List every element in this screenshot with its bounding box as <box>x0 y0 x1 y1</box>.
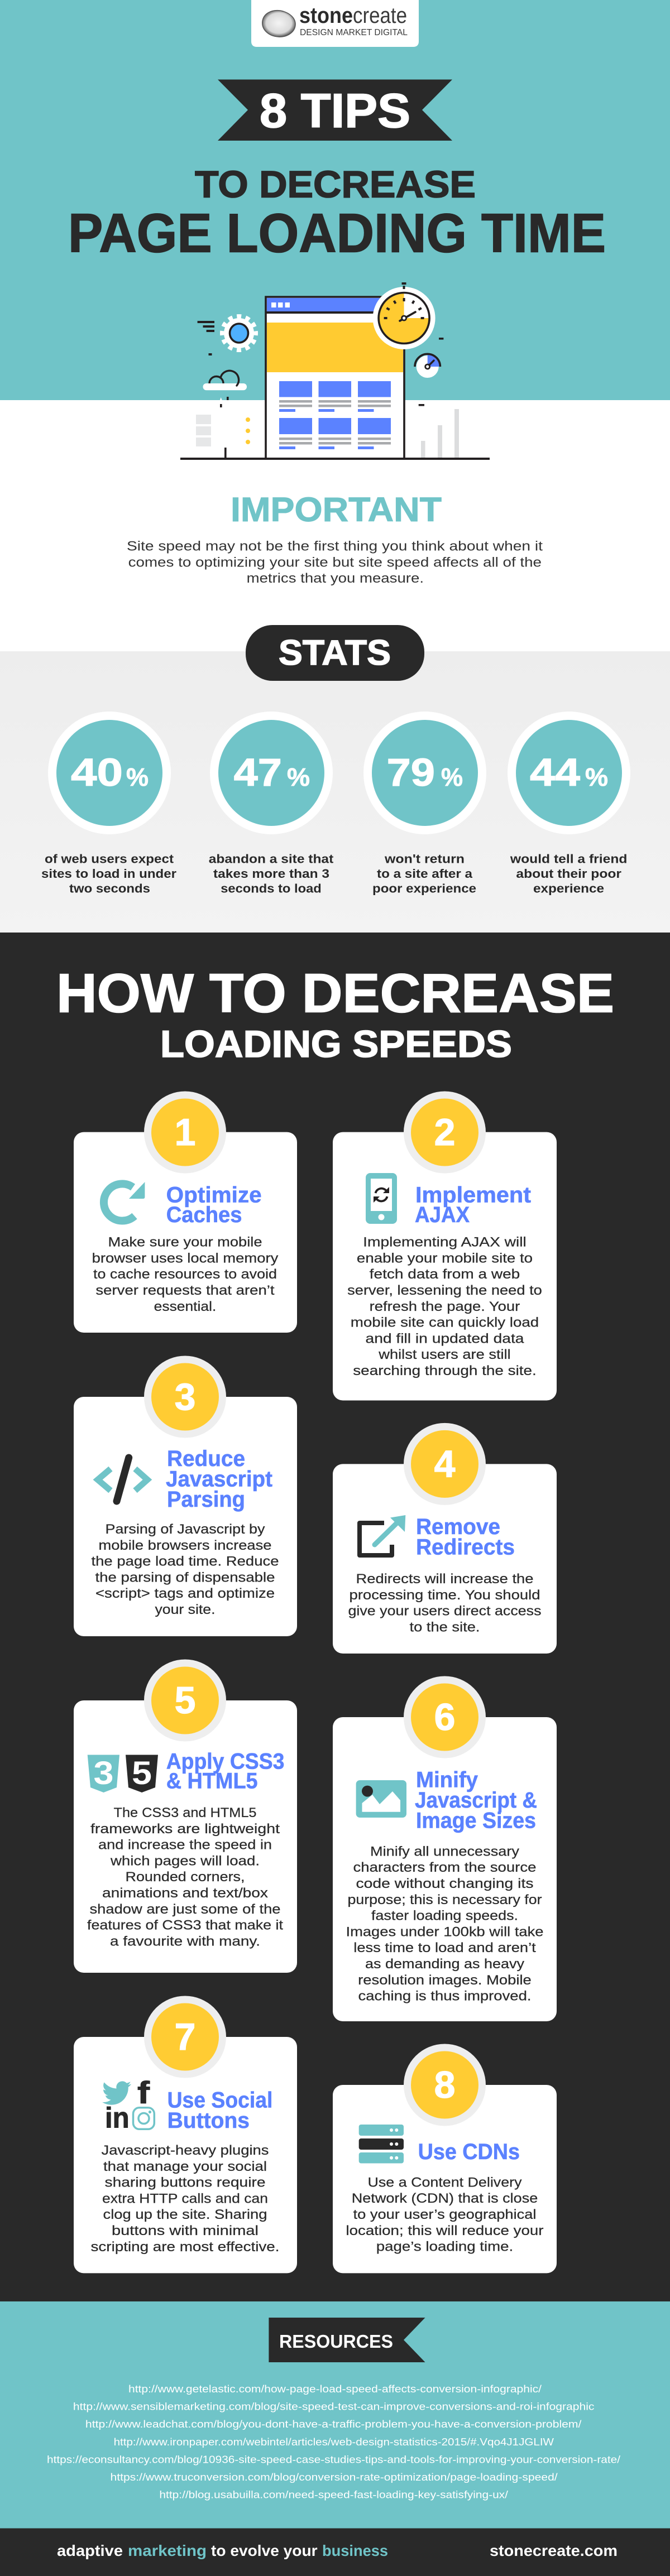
panel: tip 6: Javascript & <box>415 1788 537 1813</box>
panel: tip 4: Redirects <box>416 1535 515 1559</box>
panel: tip 8: Use CDNs <box>418 2140 520 2164</box>
footer <box>0 2528 670 2576</box>
icon: social buttons <box>102 2075 154 2135</box>
bar chart <box>421 409 459 458</box>
stat 44% <box>508 712 630 896</box>
panel: tip 7: scripting are most effective. <box>90 2239 279 2255</box>
footer: to evolve your <box>211 2542 318 2559</box>
panel: tip 6: Minify <box>416 1768 478 1792</box>
panel: tip 5: & HTML5 <box>166 1769 258 1794</box>
panel: tip 7: that manage your social <box>103 2159 267 2174</box>
panel: tip 2: fetch data from a web <box>370 1267 520 1282</box>
footer: stonecreate.com <box>490 2542 618 2559</box>
stats pill heading <box>246 625 424 681</box>
resource links: http://www.leadchat.com/blog/you-dont-have-a-traffic-problem-you-have-a-conversion-problem/ <box>85 2418 582 2430</box>
icon: phone sync <box>366 1173 397 1224</box>
ribbon banner: 8 tips <box>218 79 452 141</box>
panel: tip 4: Redirects will increase the <box>356 1571 534 1587</box>
stat 47%: % <box>287 763 310 791</box>
stat 44%: 44 <box>530 751 580 794</box>
panel: tip 6: Images under 100kb will take <box>346 1924 544 1939</box>
icon: html5 shield: 5 <box>132 1755 152 1791</box>
panel: tip 1 <box>74 1092 297 1333</box>
stat 44%: experience <box>533 882 604 896</box>
stats pill heading: STATS <box>279 633 391 672</box>
panel: tip 6: purpose; this is necessary for <box>347 1892 542 1907</box>
stat 79%: 79 <box>387 751 435 794</box>
panel: tip 5 <box>74 1660 297 1973</box>
stat 44%: about their poor <box>516 867 621 881</box>
resources flag heading <box>269 2318 425 2362</box>
panel: tip 2: enable your mobile site to <box>357 1251 533 1266</box>
icon: cloud <box>203 371 247 390</box>
panel: tip 1: Make sure your mobile <box>108 1235 262 1250</box>
stat 44%: % <box>585 763 608 791</box>
panel: tip 4: processing time. You should <box>350 1588 540 1603</box>
panel: tip 2: Implement <box>415 1183 531 1208</box>
footer: adaptive <box>57 2542 123 2559</box>
logo: stone <box>299 3 353 28</box>
important text block: comes to optimizing your site but site speed affects all of the <box>128 555 542 570</box>
panel: tip 3: <script> tags and optimize <box>95 1586 275 1601</box>
panel: tip 8: Network (CDN) that is close <box>352 2191 538 2206</box>
panel: tip 5: a favourite with many. <box>110 1934 260 1949</box>
stat 47% <box>209 712 334 896</box>
stat 79%: % <box>441 763 463 791</box>
panel: tip 6: as demanding as heavy <box>365 1957 524 1972</box>
resource links: http://www.ironpaper.com/webintel/articles/web-design-statistics-2015/#.Vqo4J1JGLIW <box>114 2436 554 2448</box>
stat 79% <box>363 712 486 896</box>
panel: tip 2 <box>333 1092 557 1401</box>
stat 40%: of web users expect <box>45 852 174 866</box>
icon: code brackets <box>98 1458 147 1501</box>
panel: tip 8: to your user’s geographical <box>353 2207 536 2222</box>
panel: tip 6: Minify all unnecessary <box>370 1844 519 1859</box>
stat 40%: sites to load in under <box>41 867 176 881</box>
panel: tip 6 <box>333 1676 557 2021</box>
icon: html5 shield <box>126 1755 158 1792</box>
stat 47%: 47 <box>234 751 282 794</box>
dark section background <box>0 933 670 2301</box>
panel: tip 2: mobile site can quickly load <box>351 1315 539 1330</box>
illustration: browser with stopwatch <box>180 282 490 460</box>
panel: tip 1: Caches <box>166 1203 242 1227</box>
stat 44%: would tell a friend <box>510 852 627 866</box>
panel: tip 6: 6 <box>434 1696 455 1738</box>
logo <box>251 0 419 47</box>
panel: resources <box>0 2301 670 2528</box>
title: TO DECREASE <box>195 163 476 205</box>
icon: stopwatch <box>373 282 436 349</box>
important text block: IMPORTANT <box>231 491 442 528</box>
panel: tip 6: caching is thus improved. <box>358 1989 532 2004</box>
panel: tip 3 <box>74 1356 297 1636</box>
panel: tip 5: and increase the speed in <box>98 1838 272 1853</box>
panel: tip 2: 2 <box>434 1111 455 1154</box>
panel: tip 7: buttons with minimal <box>112 2223 259 2238</box>
stat 79%: to a site after a <box>377 867 473 881</box>
hero section background <box>0 0 670 400</box>
panel: tip 3: the page load time. Reduce <box>92 1554 279 1569</box>
panel: tip 8: location; this will reduce your <box>346 2223 544 2238</box>
ribbon banner: 8 tips: 8 TIPS <box>260 84 410 138</box>
panel: tip 6: less time to load and aren’t <box>353 1940 536 1955</box>
stat 40% <box>41 712 176 896</box>
panel: tip 5: The CSS3 and HTML5 <box>114 1805 257 1820</box>
panel: tip 8: 8 <box>434 2064 455 2106</box>
panel: tip 3: Parsing <box>167 1487 245 1512</box>
resource links: https://econsultancy.com/blog/10936-site-speed-case-studies-tips-and-tools-for-improving-your-conversion-rate/ <box>47 2453 621 2465</box>
panel: tip 5: Rounded corners, <box>125 1869 245 1885</box>
important text block: metrics that you measure. <box>247 571 424 586</box>
resource links: https://www.truconversion.com/blog/conversion-rate-optimization/page-loading-speed/ <box>110 2471 558 2483</box>
resource links: http://www.getelastic.com/how-page-load-speed-affects-conversion-infographic/ <box>128 2383 542 2395</box>
panel: stats <box>0 625 670 933</box>
panel: tip 1: Optimize <box>166 1183 262 1208</box>
heading: how to decrease: HOW TO DECREASE <box>56 962 614 1023</box>
icon: css3 shield: 3 <box>94 1755 114 1791</box>
panel: tip 4: give your users direct access <box>348 1604 542 1619</box>
panel: tip 2: Implementing AJAX will <box>363 1235 527 1250</box>
panel: tip 4: Remove <box>416 1515 500 1539</box>
panel: tip 2: refresh the page. Your <box>370 1299 520 1314</box>
heading: how to decrease: LOADING SPEEDS <box>160 1023 512 1065</box>
panel: tip 7: Javascript-heavy plugins <box>102 2143 269 2158</box>
panel: tip 8: Use a Content Delivery <box>367 2175 521 2190</box>
stat 40%: two seconds <box>69 882 150 896</box>
stat 79%: won't return <box>384 852 465 866</box>
panel: tip 3: 3 <box>175 1376 195 1418</box>
panel: tip 2: searching through the site. <box>353 1363 537 1378</box>
panel: tip 2: server, lessening the need to <box>347 1283 542 1298</box>
panel: tip 2: whilst users are still <box>378 1347 511 1362</box>
important text block: Site speed may not be the first thing you think about when it <box>127 539 543 554</box>
panel: tip 6: resolution images. Mobile <box>358 1973 532 1988</box>
panel: tip 7: clog up the site. Sharing <box>103 2207 267 2222</box>
icon: redirect arrow <box>360 1515 405 1555</box>
panel: tip 3: Reduce <box>167 1446 245 1471</box>
resource links: http://www.sensiblemarketing.com/blog/site-speed-test-can-improve-conversions-and-roi-infographic <box>73 2401 594 2412</box>
panel: tip 5: animations and text/box <box>102 1886 268 1901</box>
icon: small gauge <box>415 354 440 378</box>
panel: tip 6: Image Sizes <box>416 1809 536 1833</box>
panel: tip 7: Use Social <box>168 2088 272 2113</box>
panel: tip 3: your site. <box>155 1602 216 1617</box>
stat 47%: abandon a site that <box>209 852 334 866</box>
panel: tip 5: Apply CSS3 <box>166 1750 284 1774</box>
resource links <box>47 2383 621 2501</box>
panel: tip 7: Buttons <box>168 2108 250 2133</box>
heading: how to decrease <box>56 962 614 1065</box>
title <box>68 163 606 263</box>
panel: tip 1: server requests that aren’t <box>95 1283 275 1298</box>
panel: tip 2: and fill in updated data <box>365 1331 524 1346</box>
panel: tip 1: to cache resources to avoid <box>93 1267 277 1282</box>
panel: tip 7: 7 <box>175 2016 195 2058</box>
logo: create <box>353 3 407 28</box>
resource links: http://blog.usabuilla.com/need-speed-fast-loading-key-satisfying-ux/ <box>159 2489 509 2501</box>
panel: tip 7 <box>74 1996 297 2273</box>
panel: tip 3: the parsing of dispensable <box>95 1570 275 1585</box>
panel: tip 5: 5 <box>175 1679 195 1722</box>
icon: gear <box>222 317 256 349</box>
panel: tip 8 <box>333 2044 557 2273</box>
icon: image <box>356 1780 406 1818</box>
footer: marketing <box>128 2542 207 2559</box>
panel: tip 1: browser uses local memory <box>92 1251 278 1266</box>
icon: ticks and grey server blocks <box>196 397 250 458</box>
panel: tip 4 <box>333 1423 557 1654</box>
important text block <box>127 491 543 586</box>
panel: tip 4: to the site. <box>410 1619 480 1635</box>
panel: tip 5: frameworks are lightweight <box>90 1822 280 1837</box>
panel: tip 7: extra HTTP calls and can <box>102 2191 268 2206</box>
panel: tip 3: Javascript <box>166 1467 272 1491</box>
stat 40%: 40 <box>71 751 123 794</box>
panel: tip 2: AJAX <box>415 1203 470 1227</box>
icon: refresh <box>104 1182 145 1220</box>
panel: tip 6: faster loading speeds. <box>371 1909 518 1924</box>
panel: tip 3: Parsing of Javascript by <box>105 1522 265 1537</box>
panel: tip 1: 1 <box>175 1111 195 1154</box>
panel: tip 4: 4 <box>434 1443 456 1485</box>
stat 47%: seconds to load <box>221 882 322 896</box>
icon: social buttons: in <box>105 2102 130 2135</box>
icon: social buttons: f <box>137 2075 150 2110</box>
icon: servers <box>359 2125 404 2163</box>
stat 47%: takes more than 3 <box>213 867 329 881</box>
icon: css3 shield <box>88 1755 119 1792</box>
icon: browser window <box>266 297 404 459</box>
panel: tip 7: sharing buttons require <box>105 2175 266 2190</box>
footer: business <box>322 2542 388 2559</box>
panel: tip 1: essential. <box>154 1299 216 1314</box>
panel: tip 5: which pages will load. <box>110 1853 260 1868</box>
panel: tip 6: characters from the source <box>353 1860 536 1875</box>
resources flag heading: RESOURCES <box>279 2331 393 2352</box>
panel: tip 3: mobile browsers increase <box>98 1538 271 1553</box>
stat 40%: % <box>126 763 149 791</box>
stat 79%: poor experience <box>372 882 476 896</box>
logo: DESIGN MARKET DIGITAL <box>300 28 408 37</box>
title: PAGE LOADING TIME <box>68 202 606 263</box>
panel: tip 5: features of CSS3 that make it <box>87 1918 283 1933</box>
icon: speed lines <box>198 321 443 406</box>
panel: tip 6: code without changing its <box>356 1876 534 1891</box>
panel: tip 5: shadow are just some of the <box>89 1902 280 1917</box>
panel: tip 8: page’s loading time. <box>376 2239 513 2255</box>
